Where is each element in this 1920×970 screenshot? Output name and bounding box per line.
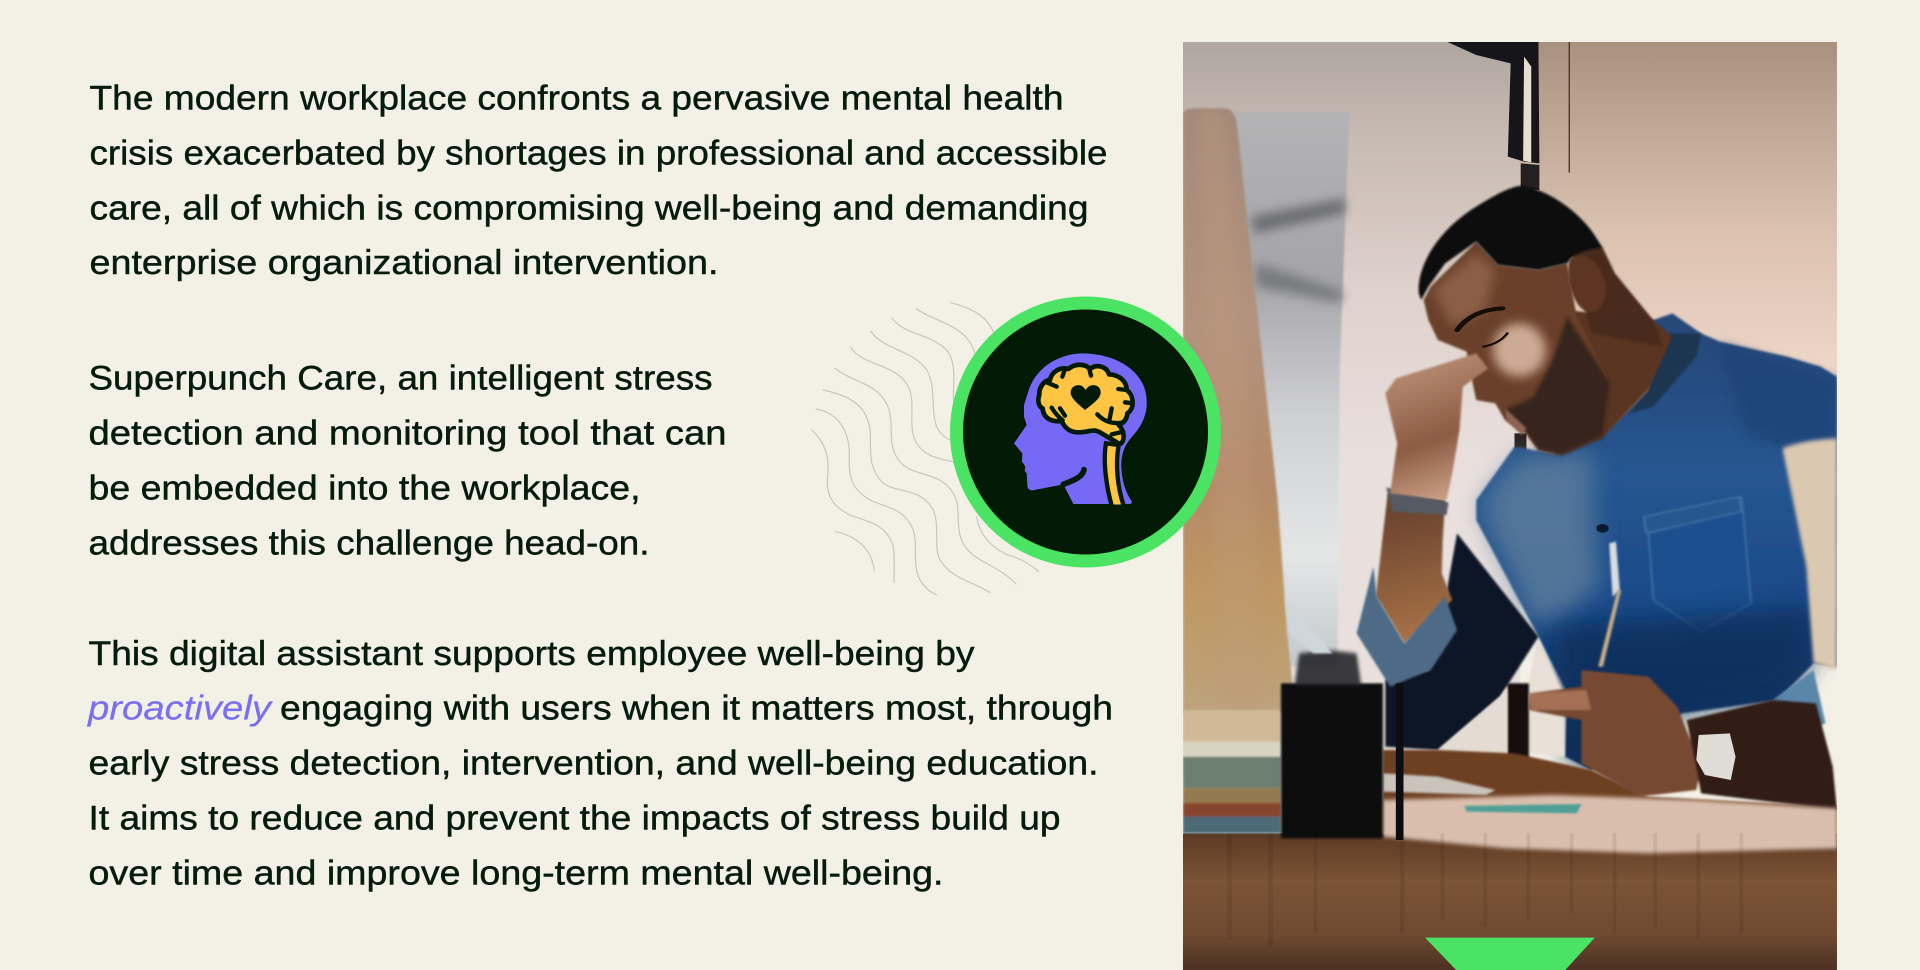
photo pen holder [1281,597,1403,840]
photo rolled sleeve [1357,567,1457,687]
photo lit cheek [1493,323,1546,377]
photo hair [1419,186,1603,300]
photo dark left torso and arm [1385,533,1538,750]
photo forearm raised [1376,493,1452,643]
text block: intro paragraph [90,79,1108,282]
photo wristband [1386,487,1448,515]
photo streak artifacts [1227,833,1743,947]
photo background gap behind torso [1529,640,1565,757]
photo: stressed man at desk [1183,42,1837,970]
photo desk foreground [1183,833,1837,970]
text block: digital assistant paragraph: engaging with users when it matters most, through [280,689,1113,727]
heart [1071,385,1101,410]
jaw line [1063,470,1084,484]
brain [1038,365,1133,444]
photo back of skull [1572,246,1662,346]
photo left desk items [1183,710,1281,833]
icon: brain in head badge [956,303,1214,561]
photo monitor left [1183,108,1295,713]
photo right foreground blur [1782,438,1837,670]
text block: Superpunch Care paragraph: Superpunch Care, an intelligent stress [88,359,712,397]
photo middle wall [1183,42,1520,775]
photo shirt [1476,313,1837,770]
photo eyebrow and eye [1457,308,1507,347]
text block: digital assistant paragraph: This digital assistant supports employee well-being by [88,635,975,673]
text block: intro paragraph: The modern workplace confronts a pervasive mental health [90,79,1064,117]
spinal cord [1105,443,1124,507]
text block: Superpunch Care paragraph: be embedded into the workplace, [88,469,640,507]
text block: Superpunch Care paragraph: addresses this challenge head-on. [88,524,650,562]
photo teal print [1464,804,1581,813]
photo wall bracket [1448,42,1570,453]
photo lips [1505,408,1526,435]
text block: intro paragraph: crisis exacerbated by shortages in professional and accessible [90,134,1108,172]
photo ear [1568,256,1606,312]
photo paper on desk [1383,795,1837,853]
photo monitor lit strip [1204,119,1250,599]
text block: digital assistant paragraph: early stress detection, intervention, and well-being education. [88,744,1098,782]
photo beard [1505,317,1610,455]
photo face [1424,242,1610,455]
photo raised hand [1385,353,1488,500]
text block: digital assistant paragraph: proactively [87,689,273,727]
icon: head and brain [1014,353,1147,507]
photo post behind torso [1507,683,1529,760]
wavy decorative lines [812,303,1038,595]
text block: digital assistant paragraph: It aims to reduce and prevent the impacts of stress build up [88,799,1060,837]
photo wristwatch [1696,733,1736,780]
text block: digital assistant paragraph [87,635,1113,892]
text block: intro paragraph: enterprise organizational intervention. [90,244,718,282]
text block: Superpunch Care paragraph [88,359,726,562]
photo forehead light [1433,253,1495,327]
photo window [1232,112,1349,667]
photo wall [1520,42,1837,450]
text block: digital assistant paragraph: over time and improve long-term mental well-being. [88,854,944,892]
photo desk surface [1383,750,1837,833]
text block: Superpunch Care paragraph: detection and monitoring tool that can [88,414,726,452]
brain folds [1045,369,1133,434]
arrow: green triangle pointer [1425,938,1595,970]
badge circle [956,303,1214,561]
head silhouette [1014,353,1147,504]
photo wall gap under elbow [1438,687,1507,760]
photo keyboard [1383,773,1495,795]
text block: intro paragraph: care, all of which is compromising well-being and demanding [90,189,1088,227]
photo neck [1574,310,1674,442]
photo lower hand [1529,670,1837,810]
